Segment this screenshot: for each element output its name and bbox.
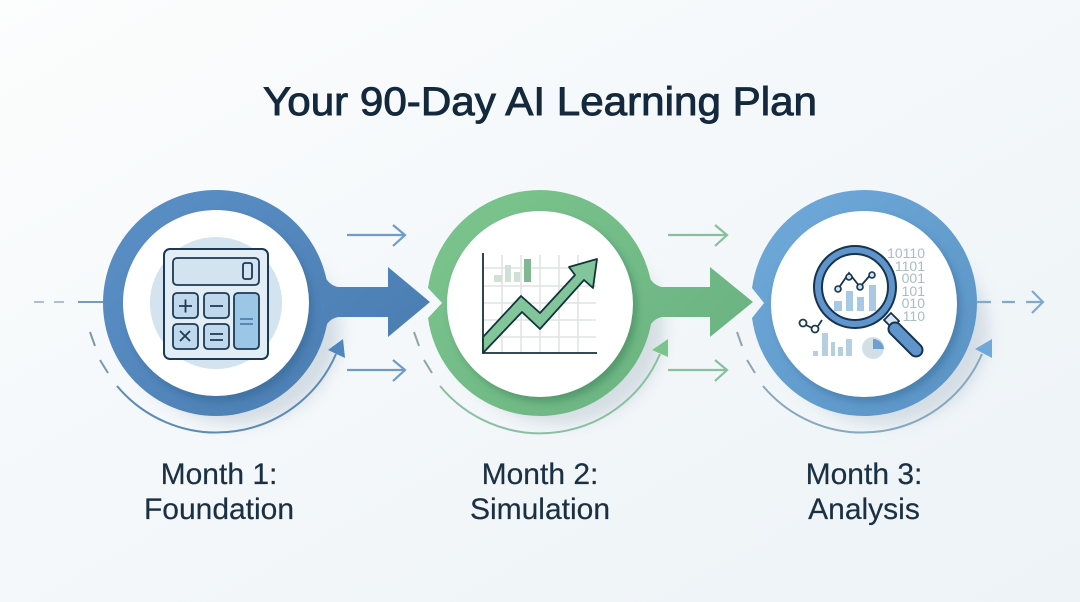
label month 2: Simulation (470, 493, 610, 526)
incoming dashed line (34, 301, 104, 303)
binary digits: 010 (902, 295, 925, 311)
disc shadow (775, 216, 961, 402)
small arrows month 1 (347, 225, 405, 381)
ring month 1 (103, 190, 329, 416)
disc shadow (127, 216, 313, 402)
cycle arc month 3 (737, 332, 992, 432)
icon: magnifying glass (814, 246, 916, 350)
small arrows month 2 (668, 225, 727, 381)
icon: small bars and pie (813, 333, 884, 359)
panel: month 1 step (90, 190, 430, 526)
white disc (447, 211, 633, 397)
ring month 3 (752, 190, 977, 416)
binary digits: 1101 (895, 258, 925, 274)
binary digits: 110 (903, 308, 925, 324)
arrow month 2 (624, 267, 753, 337)
ring shadow (780, 236, 988, 424)
label month 1: Foundation (144, 493, 294, 526)
label month 3: Month 3: (806, 458, 922, 491)
cycle arc month 2 (414, 332, 668, 433)
ring shadow (132, 236, 340, 424)
panel: month 2 step (414, 190, 753, 526)
white disc (771, 211, 957, 397)
ring month 2 (428, 190, 653, 416)
outgoing dashed arrow (977, 291, 1043, 313)
disc shadow (451, 216, 637, 402)
label month 3: Analysis (808, 493, 920, 526)
icon: small nodes (800, 320, 822, 332)
icon: calculator (150, 237, 282, 369)
title: Your 90-Day AI Learning Plan (263, 80, 817, 124)
panel: month 3 step (737, 190, 992, 526)
binary digits: 101 (902, 283, 925, 299)
ring shadow (456, 236, 664, 424)
white disc (123, 210, 309, 396)
cycle arc month 1 (90, 332, 345, 432)
binary digits: 10110 (887, 245, 925, 261)
icon: growth chart (483, 253, 597, 353)
label month 2: Month 2: (482, 458, 598, 491)
label month 1: Month 1: (161, 458, 277, 491)
binary digits: 001 (902, 270, 925, 286)
arrow month 1 (300, 267, 430, 337)
